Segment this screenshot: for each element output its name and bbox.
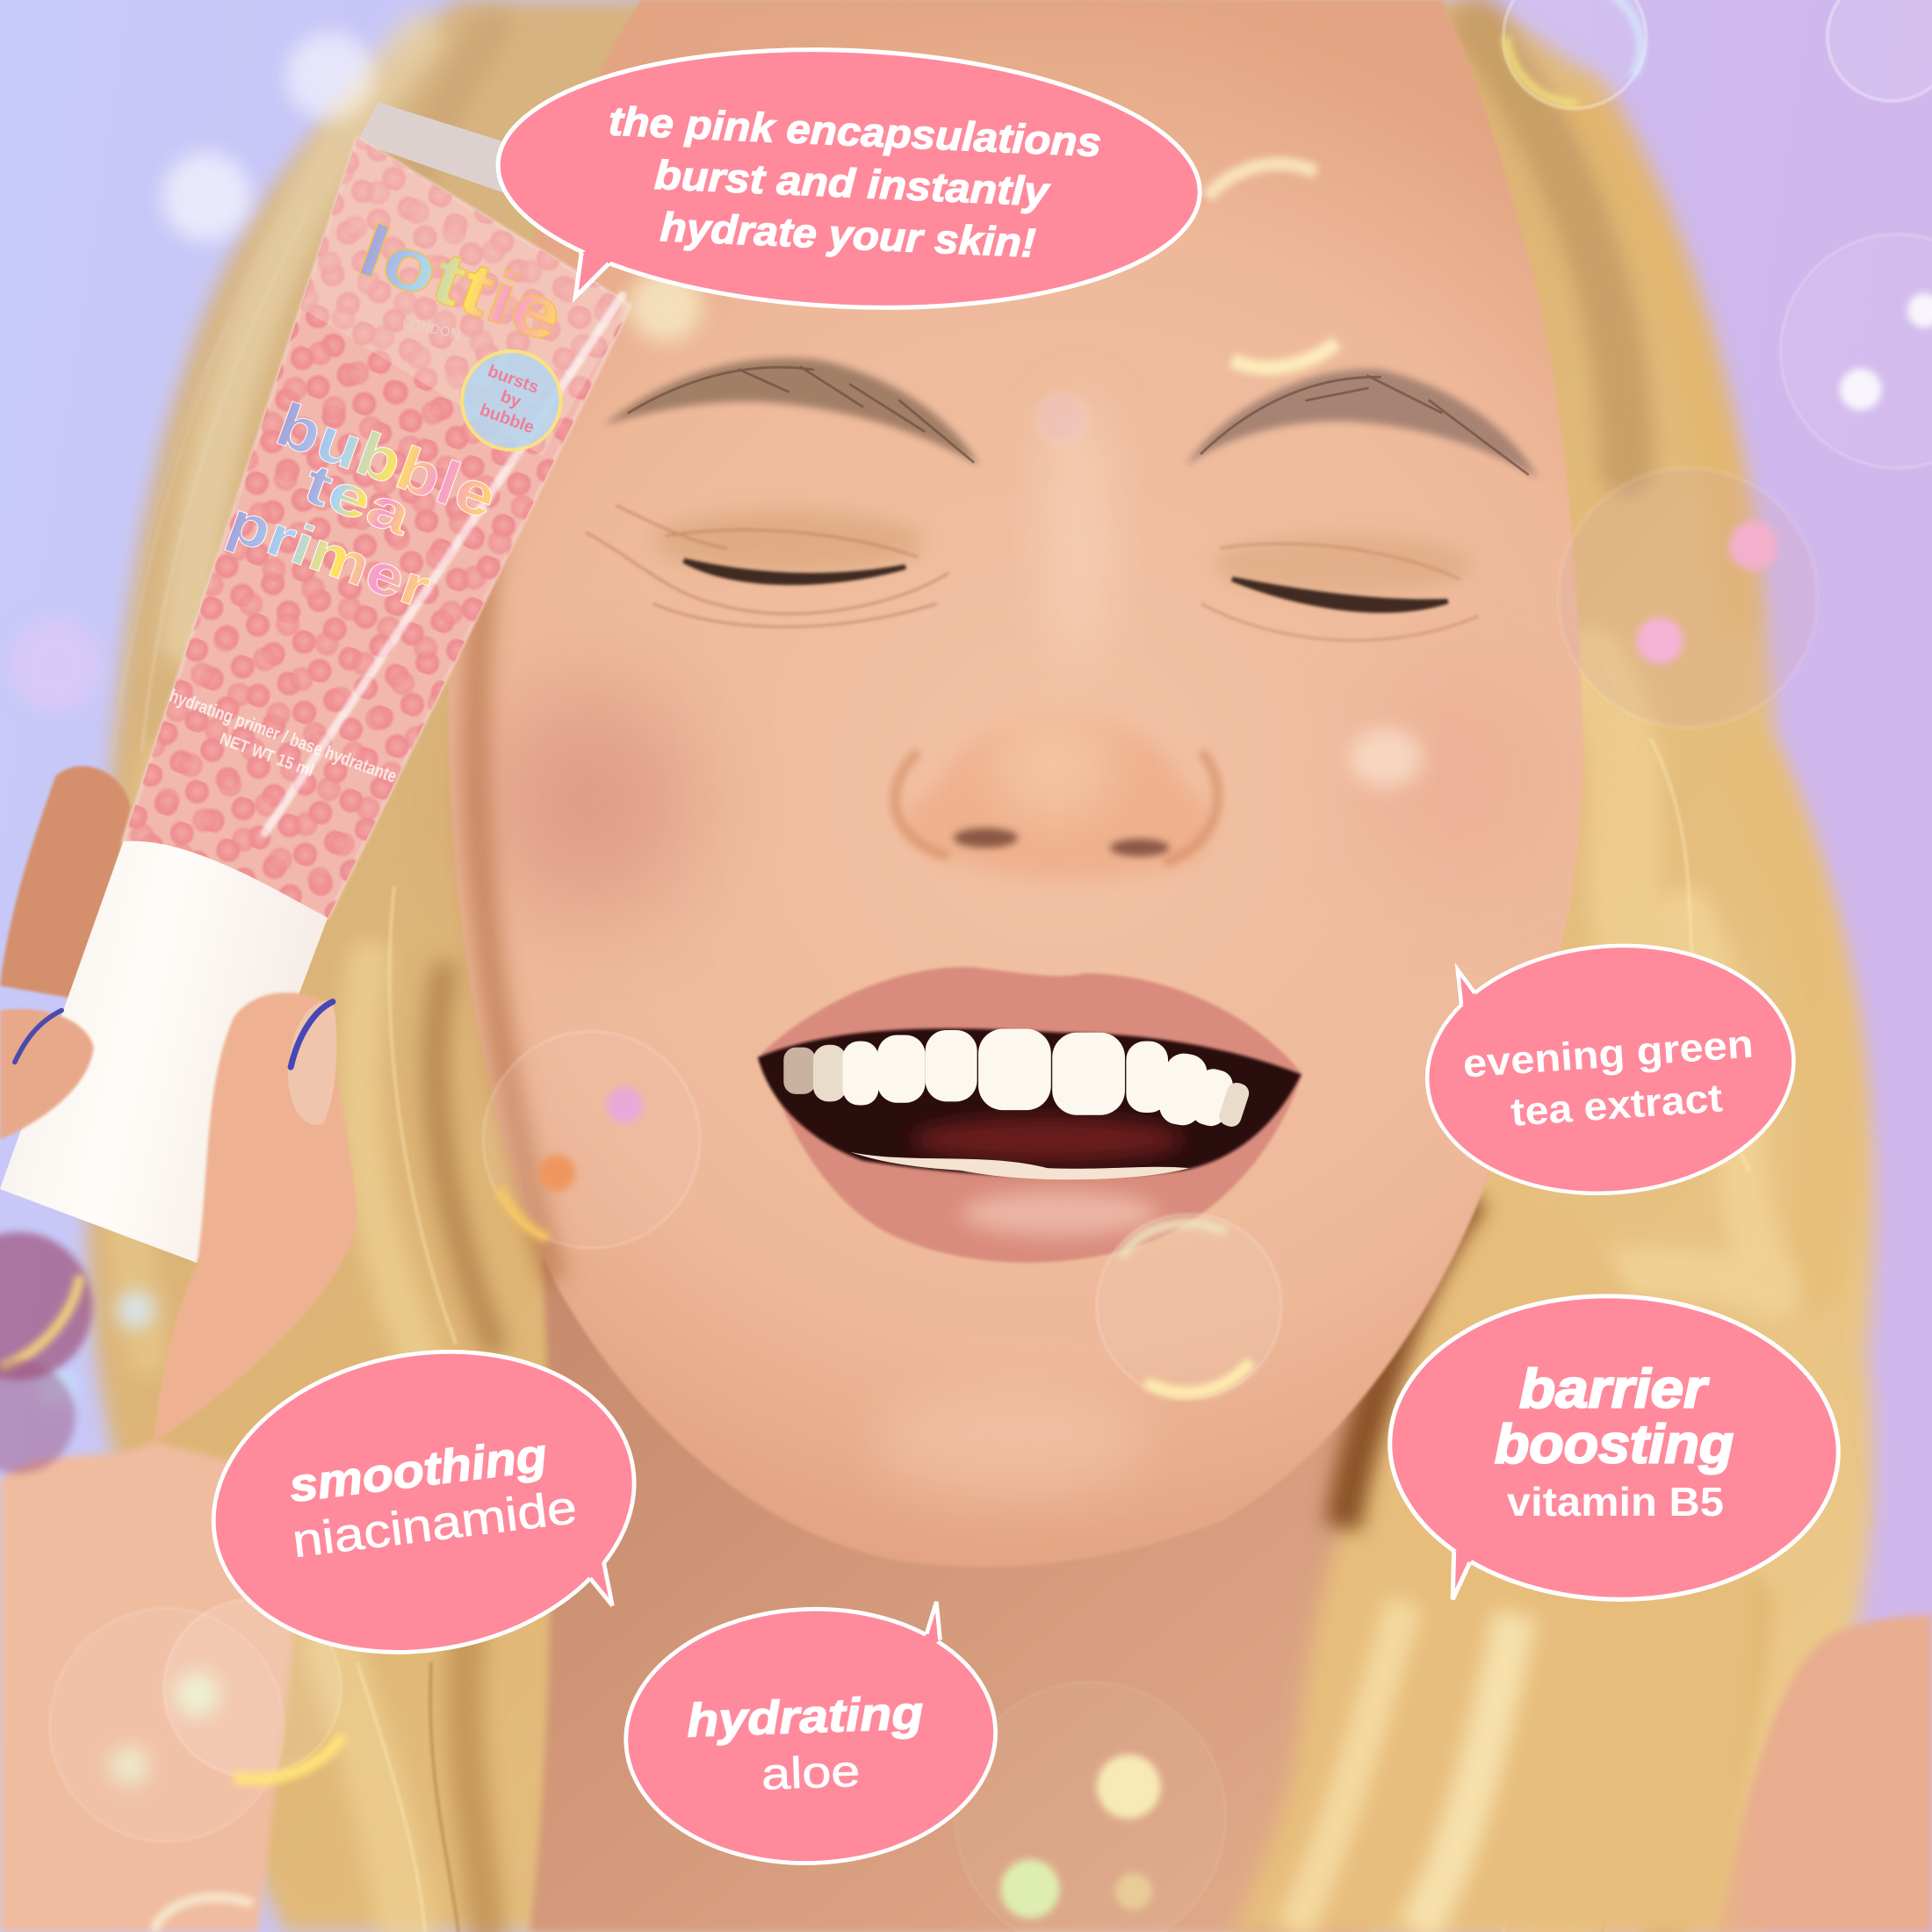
bubble: forehead arcs: [1037, 164, 1337, 443]
callout: the pink encapsulations: the pink encapsulations: [608, 98, 1102, 165]
lower teeth: [850, 1152, 1189, 1179]
shoulder: [1712, 1614, 1932, 1932]
thumbnail: [288, 1000, 336, 1125]
tube product name: [220, 389, 506, 620]
tube small print: [167, 686, 400, 787]
tube small print: NET WT 15 ml: [217, 730, 316, 782]
callout: the pink encapsulations: [493, 35, 1206, 322]
callout: smoothing niacinamide: smoothing: [286, 1430, 550, 1512]
tube product name: tea: [296, 451, 421, 548]
bubble: top right: [1503, 0, 1646, 108]
eyebrow right: [1186, 369, 1538, 478]
tube cap: [0, 841, 328, 1263]
eyebrow left: [604, 358, 979, 465]
neck: [530, 1171, 1479, 1932]
product tube: [0, 102, 641, 1263]
bubble: cheek: [483, 1031, 700, 1248]
hand: [0, 766, 299, 1932]
face: [448, 0, 1583, 1567]
bubble: over hair with pink dots: [1559, 468, 1818, 727]
callout: evening green tea extract: [1417, 931, 1804, 1208]
mouth interior: [758, 1028, 1301, 1177]
mouth: [758, 967, 1302, 1263]
tube body: [123, 138, 631, 918]
callout: the pink encapsulations: hydrate your skin!: [660, 204, 1037, 266]
tube brand: lottie: [349, 208, 573, 357]
tube badge: bursts: [485, 362, 541, 398]
eye left: [585, 505, 948, 627]
hair over right side of neck: [1232, 1171, 1762, 1932]
callout: hydrating aloe: hydrating: [686, 1687, 924, 1748]
fingertip over cap: [0, 1009, 94, 1140]
tube small print: hydrating primer / base hydratante: [167, 686, 400, 787]
tube product name: primer: [220, 489, 439, 620]
tube product name: bubble: [268, 389, 506, 532]
callout: hydrating aloe: [622, 1602, 1000, 1870]
callout: hydrating aloe: aloe: [761, 1746, 861, 1799]
callout: barrier boosting vitamin B5: [1385, 1288, 1843, 1607]
tube brand: LONDON: [401, 315, 461, 342]
bubble: bottom centre: [955, 1682, 1226, 1932]
tube badge: [462, 351, 560, 450]
tube brand: [341, 208, 573, 379]
bubble: left dark: [0, 1232, 92, 1474]
callout: smoothing niacinamide: niacinamide: [290, 1481, 580, 1568]
lips: [761, 967, 1302, 1263]
bubble: corner: [1827, 0, 1932, 101]
callout: barrier boosting vitamin B5: barrier: [1519, 1359, 1709, 1419]
bubble: chin: [1097, 1214, 1281, 1398]
callout: evening green tea extract: evening green: [1461, 1021, 1755, 1086]
callout: barrier boosting vitamin B5: vitamin B5: [1507, 1479, 1724, 1525]
callout: evening green tea extract: tea extract: [1510, 1075, 1724, 1135]
bubble: lower left: [49, 1599, 342, 1932]
callout: barrier boosting vitamin B5: boosting: [1495, 1414, 1734, 1474]
thumb over cap: [154, 992, 357, 1442]
upper teeth: [783, 1029, 1251, 1129]
eye right: [1201, 535, 1479, 640]
nose: [895, 709, 1218, 879]
bubble: right with dots: [1780, 234, 1932, 468]
tube badge: bubble: [477, 400, 537, 437]
tube badge: by: [498, 386, 523, 412]
callout: smoothing niacinamide: [190, 1320, 659, 1684]
callout: the pink encapsulations: burst and instantly: [653, 152, 1051, 214]
tube crimp: [357, 102, 641, 234]
